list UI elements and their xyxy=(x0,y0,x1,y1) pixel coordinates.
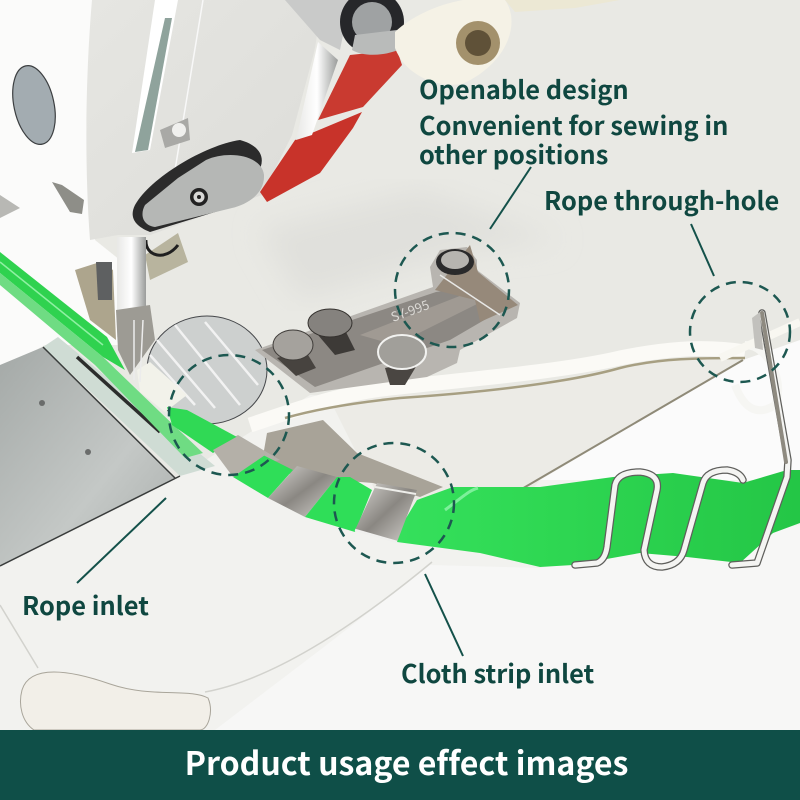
green strip left of needle xyxy=(0,252,125,370)
machine head front panel xyxy=(86,0,317,240)
main green strip xyxy=(397,470,800,567)
tension coil xyxy=(340,0,404,54)
leader line: cloth strip inlet xyxy=(425,574,463,656)
rubber foot xyxy=(20,672,210,730)
dashed circle: rope inlet xyxy=(169,355,289,475)
label: openable design: Openable design xyxy=(419,71,629,107)
bright area under edge xyxy=(540,340,800,480)
wire guide S-bends xyxy=(575,313,788,567)
round throat plate xyxy=(147,316,267,424)
footer title: Product usage effect images xyxy=(185,739,628,785)
thumb screws xyxy=(273,309,426,385)
model text: SY-995 xyxy=(388,294,432,326)
lower table surface xyxy=(0,390,800,730)
feed slot xyxy=(77,357,160,432)
rope hole tab xyxy=(752,312,763,350)
presser bar xyxy=(117,237,146,337)
round window xyxy=(6,62,62,148)
needle plate rail xyxy=(43,337,215,476)
dashed circle: cloth strip inlet xyxy=(334,443,454,563)
wedge of table between rope and edge xyxy=(330,357,743,553)
thread xyxy=(175,0,203,170)
white left of machine xyxy=(0,0,120,370)
green patches and metal clips xyxy=(167,407,417,542)
thread spool xyxy=(395,0,512,85)
leader line: rope through-hole xyxy=(691,224,714,276)
small screw hole xyxy=(52,182,84,214)
rope xyxy=(250,349,745,425)
label: cloth strip inlet: Cloth strip inlet xyxy=(401,655,595,691)
label: convenient for sewing: Convenient for sewing in xyxy=(419,107,728,143)
footer banner xyxy=(0,730,800,800)
presser foot xyxy=(75,262,116,340)
knurled lever xyxy=(145,233,188,280)
folder attachment plate xyxy=(255,247,520,393)
leader line: rope inlet xyxy=(77,498,166,583)
dashed circle: openable hinge xyxy=(395,233,509,347)
leader line: openable design xyxy=(490,167,531,229)
tension dial xyxy=(133,140,262,232)
red sliders xyxy=(318,50,402,120)
shaded table band xyxy=(260,190,560,300)
top bracket tube xyxy=(296,42,338,140)
thread guide bar xyxy=(132,0,178,153)
folder curved body xyxy=(262,420,443,497)
needle xyxy=(134,320,143,382)
label: convenient for sewing: other positions xyxy=(419,136,608,172)
label: rope inlet: Rope inlet xyxy=(22,587,149,623)
dashed circle: rope through-hole xyxy=(690,282,790,382)
grey slide plate xyxy=(0,347,175,566)
white foot piece xyxy=(137,362,187,412)
label: rope through-hole: Rope through-hole xyxy=(544,182,779,218)
table edge curves xyxy=(0,562,432,692)
